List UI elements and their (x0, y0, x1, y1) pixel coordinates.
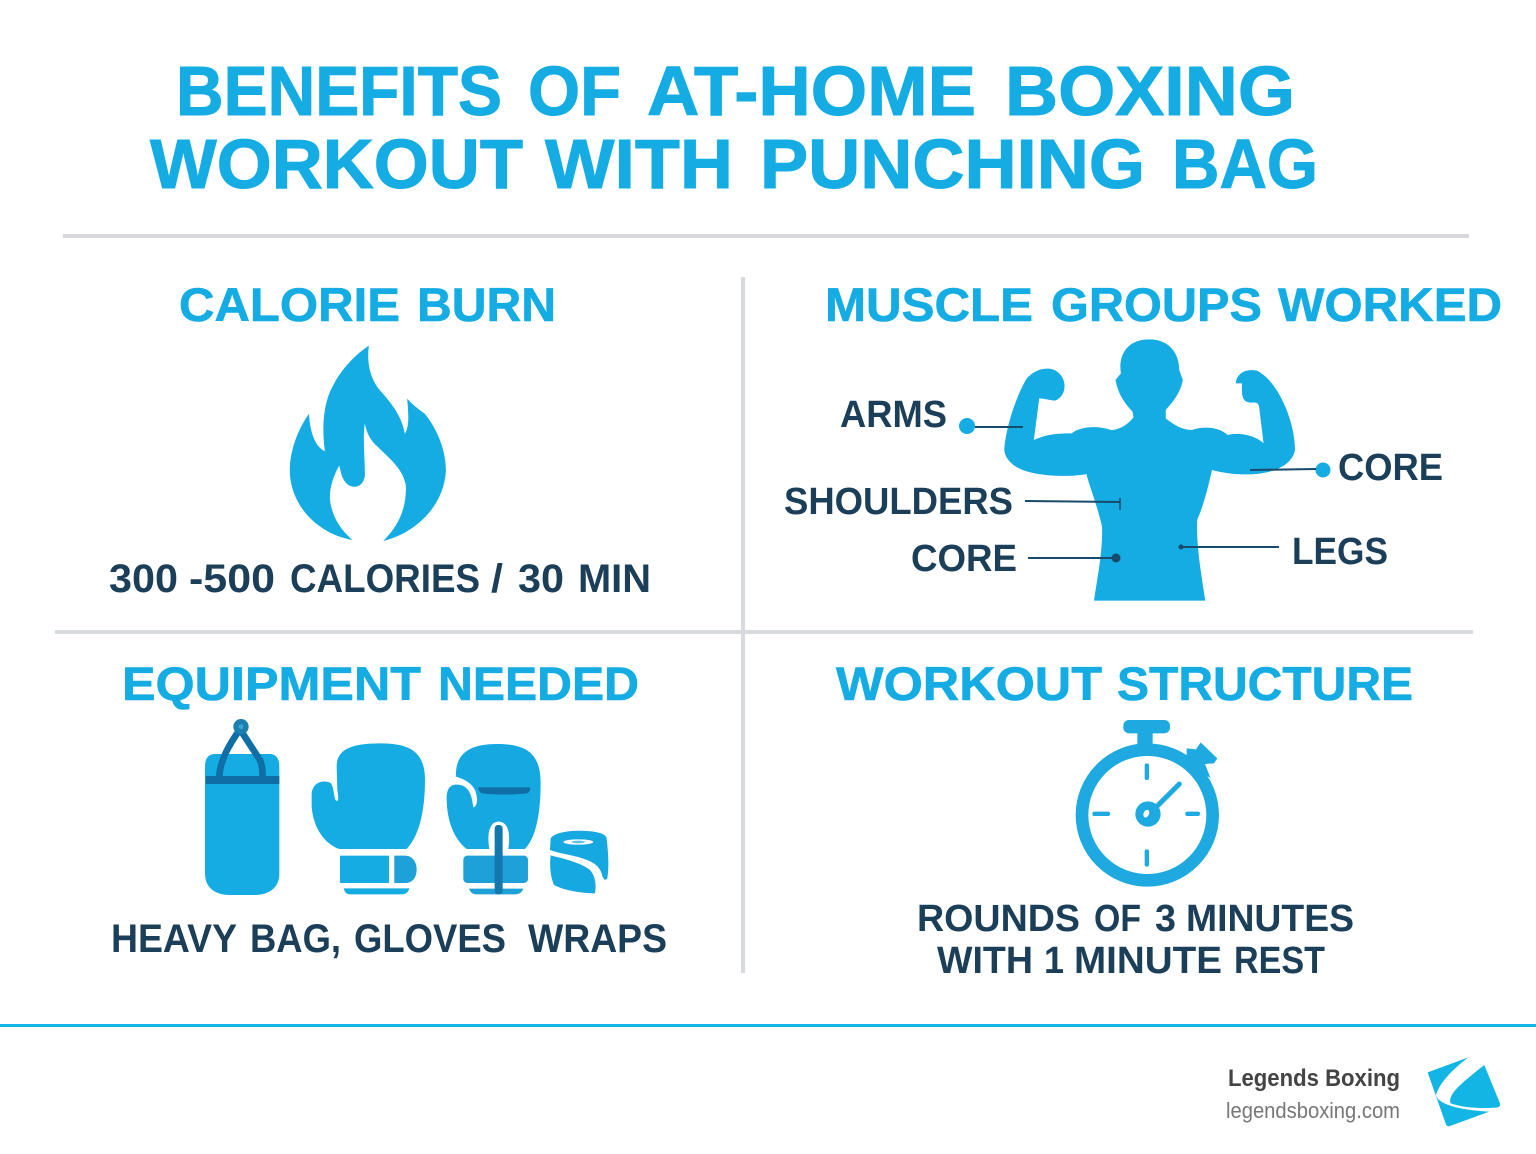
heading: workout structure: WORKOUT (836, 657, 1102, 710)
heading: equipment needed: EQUIPMENT (122, 657, 421, 710)
calorie stat: / (491, 557, 503, 601)
label: legs: LEGS (1292, 531, 1388, 573)
label: arms: ARMS (840, 394, 947, 436)
icon: boxing glove front (312, 743, 425, 894)
heading: calorie burn (179, 278, 556, 331)
label: legs (1178, 531, 1388, 573)
calorie stat: 300 (109, 557, 178, 601)
icon: logo (1428, 1057, 1500, 1126)
workout caption: OF (1094, 898, 1141, 940)
heading: equipment needed: NEEDED (438, 657, 639, 710)
title: BAG (1172, 125, 1318, 203)
icon: flame (290, 346, 446, 541)
workout caption: REST (1234, 940, 1325, 982)
heading: calorie burn: BURN (417, 278, 556, 331)
workout caption: MINUTES (1186, 898, 1354, 940)
calorie stat: 30 (518, 557, 564, 601)
title: BOXING (1005, 52, 1295, 130)
calorie stat (109, 557, 651, 601)
title: BENEFITS (176, 52, 502, 130)
footer brand (1226, 1057, 1500, 1126)
workout caption: ROUNDS (917, 898, 1080, 940)
heading: muscle groups worked (825, 278, 1502, 331)
heading: muscle groups worked: MUSCLE (825, 278, 1033, 331)
panel: muscle groups worked (784, 278, 1502, 601)
label: core right (1250, 447, 1443, 489)
title: AT-HOME (647, 52, 976, 130)
equipment caption: GLOVES (354, 917, 506, 961)
icon: flexing torso silhouette (1004, 339, 1295, 601)
panel: calorie burn (109, 278, 651, 601)
icon: boxing glove side (447, 744, 541, 894)
label: core right: CORE (1338, 447, 1443, 489)
title (150, 52, 1318, 203)
heading: workout structure: STRUCTURE (1117, 657, 1413, 710)
panel: equipment needed (111, 657, 667, 961)
label: shoulders: SHOULDERS (784, 481, 1013, 523)
equipment caption (111, 917, 667, 961)
icon: stopwatch (1082, 720, 1217, 880)
icon: heavy bag (205, 719, 279, 895)
equipment caption: WRAPS (528, 917, 667, 961)
workout caption: 3 (1155, 898, 1176, 940)
calorie stat: CALORIES (290, 557, 480, 601)
calorie stat: MIN (578, 557, 651, 601)
brand url: legendsboxing.com (1226, 1098, 1400, 1123)
brand name: Legends Boxing (1228, 1065, 1400, 1092)
panel: workout structure (836, 657, 1413, 982)
heading: calorie burn: CALORIE (179, 278, 400, 331)
label: arms (840, 394, 1023, 436)
label: core left (911, 538, 1120, 580)
heading: workout structure (836, 657, 1413, 710)
icon: hand wraps roll (550, 831, 608, 893)
title: WITH (545, 125, 733, 203)
heading: muscle groups worked: GROUPS (1051, 278, 1262, 331)
equipment caption: BAG, (250, 917, 341, 961)
workout caption: WITH (937, 940, 1033, 982)
label: core left: CORE (911, 538, 1017, 580)
workout caption: MINUTE (1074, 940, 1222, 982)
title: OF (528, 52, 621, 130)
equipment caption: HEAVY (111, 917, 237, 961)
heading: equipment needed (122, 657, 639, 710)
heading: muscle groups worked: WORKED (1278, 278, 1502, 331)
title: WORKOUT (150, 125, 523, 203)
title: PUNCHING (760, 125, 1145, 203)
workout caption (917, 898, 1354, 982)
workout caption: 1 (1044, 940, 1064, 982)
calorie stat: -500 (189, 557, 275, 601)
